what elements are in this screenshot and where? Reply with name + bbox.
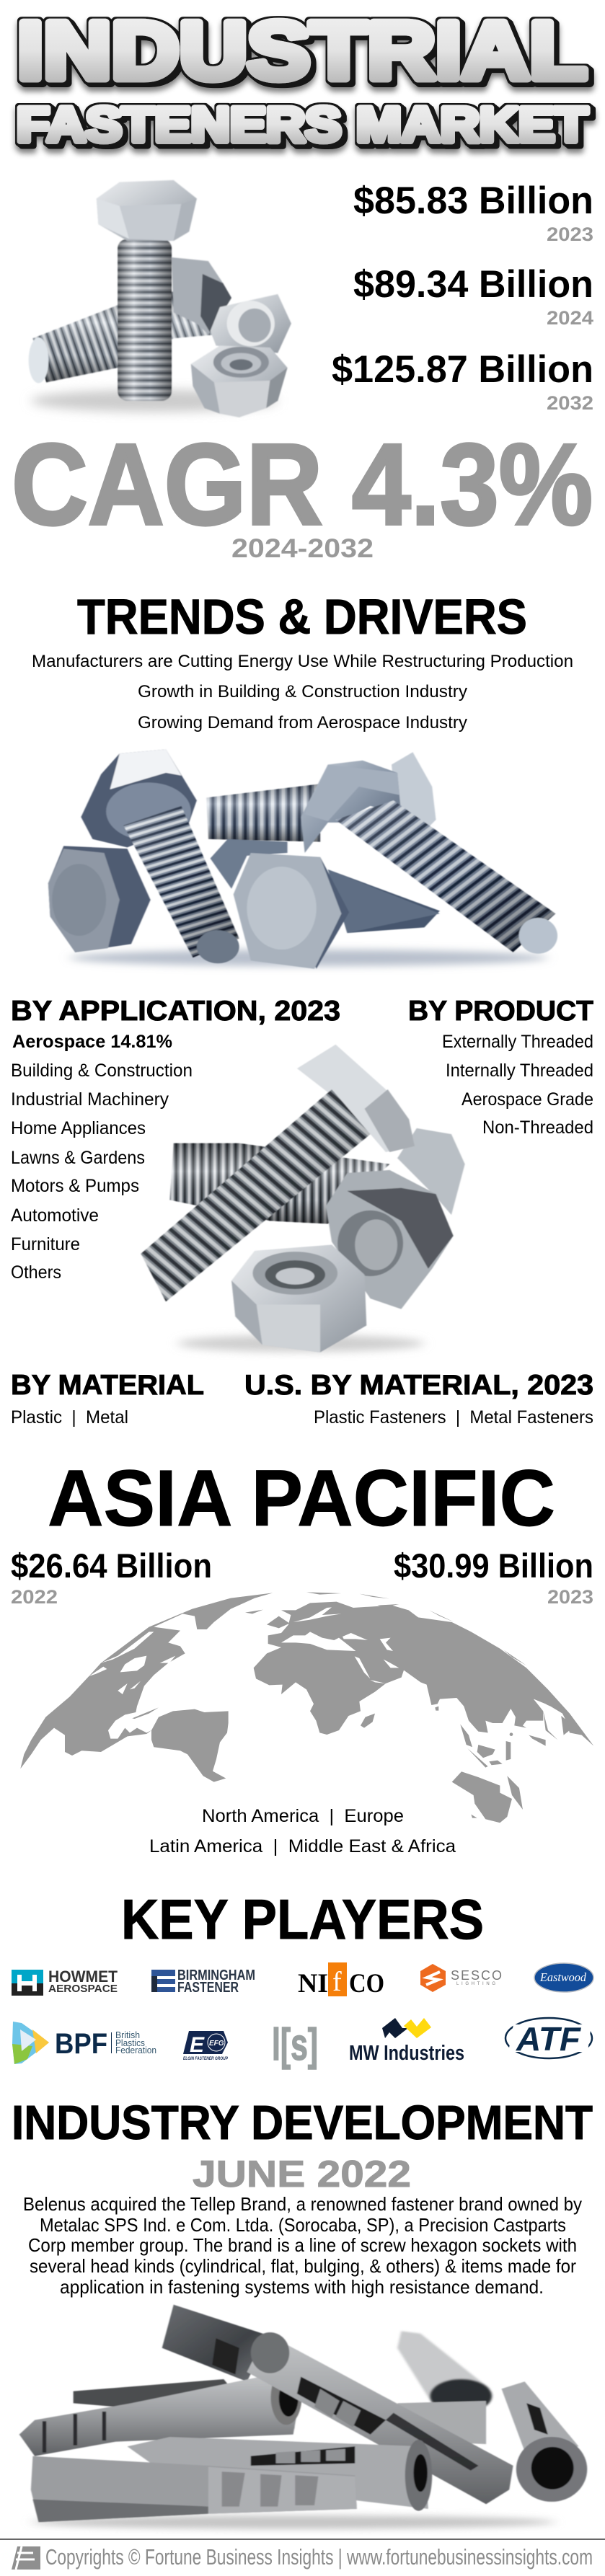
map: world globe: [12, 1592, 593, 1823]
title: [17, 5, 588, 152]
2023 figure: [394, 1546, 593, 1608]
image: pile of bolts: [48, 749, 557, 969]
description: several head kinds (cylindrical, flat, bulging, & others) & items made for: [30, 2255, 576, 2277]
title: INDUSTRIAL: [17, 5, 587, 96]
market size figures: $89.34 Billion: [353, 263, 593, 306]
region list: North America | Europe: [202, 1806, 404, 1826]
panel: by application: Furniture: [11, 1234, 80, 1254]
logo: british plastics federation: BPF: [55, 2028, 107, 2060]
heading: asia pacific: ASIA PACIFIC: [48, 1454, 555, 1543]
image: bolt and nuts: [29, 180, 291, 417]
logo: sesco lighting: [420, 1964, 502, 1992]
panel: by application: Others: [11, 1262, 61, 1283]
driver list: Growing Demand from Aerospace Industry: [138, 713, 468, 732]
panel: by application: Motors & Pumps: [11, 1176, 139, 1196]
image: bolt with nuts: [141, 1045, 465, 1353]
2023 figure: $30.99 Billion: [394, 1546, 593, 1585]
logo: british plastics federation: [12, 2022, 156, 2064]
logo: lisi: l[s]: [272, 2020, 318, 2070]
panel: by product: Externally Threaded: [442, 1032, 593, 1052]
logo: elgin fastener group: ELGIN FASTENER GROUP: [183, 2056, 228, 2061]
panel: by application: Lawns & Gardens: [11, 1148, 145, 1168]
2022 figure: 2022: [11, 1586, 58, 1608]
date: JUNE 2022: [193, 2154, 411, 2195]
panel: by application: Industrial Machinery: [11, 1089, 169, 1110]
panel: by product: Internally Threaded: [446, 1061, 593, 1081]
panel: by product: Non-Threaded: [482, 1117, 593, 1138]
logo: nifco: f: [332, 1967, 342, 1997]
description: Corp member group. The brand is a line of screw hexagon sockets with: [28, 2234, 577, 2256]
logo: eastwood: [534, 1963, 593, 1992]
logo: birmingham fastener: BIRMINGHAM: [177, 1968, 255, 1983]
logo: nifco: CO: [349, 1969, 384, 1999]
region list: Latin America | Middle East & Africa: [149, 1836, 456, 1856]
driver list: [32, 652, 573, 732]
panel: by application: Aerospace 14.81%: [12, 1032, 172, 1052]
logo: british plastics federation: Federation: [115, 2045, 156, 2055]
logo: howmet aerospace: [12, 1968, 118, 1996]
panel: by application: BY APPLICATION, 2023: [11, 996, 340, 1027]
panel: by product: [408, 996, 593, 1138]
logo: british plastics federation: British: [115, 2030, 140, 2040]
logo: eastwood: Eastwood: [539, 1970, 586, 1984]
panel: us by material: [244, 1370, 593, 1428]
panel: by product: BY PRODUCT: [408, 996, 593, 1027]
2023 figure: 2023: [547, 1586, 593, 1608]
logo: elgin fastener group: EFG: [209, 2040, 224, 2048]
title: FASTENERS MARKET: [17, 97, 588, 152]
logo: howmet aerospace: HOWMET: [48, 1968, 118, 1986]
panel: asia pacific: [11, 1454, 593, 1608]
logo: atf: ATF: [516, 2020, 582, 2058]
panel: by application: Automotive: [11, 1205, 99, 1226]
panel: industry development: [12, 2096, 593, 2298]
logo: mw industries: [349, 2018, 464, 2065]
logo: birmingham fastener: [151, 1968, 255, 1996]
description: Metalac SPS Ind. e Com. Ltda. (Sorocaba, SP), a Precision Castparts: [40, 2214, 566, 2236]
market size figures: 2024: [547, 307, 593, 329]
logo: howmet aerospace: AEROSPACE: [48, 1983, 118, 1995]
logo: mw industries: MW Industries: [349, 2042, 464, 2065]
icon: fortune business insights logo: [12, 2546, 40, 2570]
market size figures: 2023: [547, 223, 593, 245]
logo: elgin fastener group: E: [190, 2033, 205, 2057]
footer: [0, 2539, 605, 2570]
panel: us by material: U.S. BY MATERIAL, 2023: [244, 1370, 593, 1401]
description: [23, 2193, 582, 2298]
market size figures: $125.87 Billion: [332, 348, 593, 391]
panel: by application: Home Appliances: [11, 1118, 146, 1138]
logo: nifco: NI: [298, 1969, 328, 1999]
2022 figure: [11, 1546, 212, 1608]
panel: by material: [11, 1370, 204, 1428]
logo: elgin fastener group: [183, 2031, 228, 2061]
heading: trends and drivers: TRENDS & DRIVERS: [77, 589, 527, 645]
logo: birmingham fastener: FASTENER: [177, 1980, 239, 1996]
logo: british plastics federation: Plastics: [115, 2037, 145, 2048]
2022 figure: $26.64 Billion: [11, 1546, 212, 1585]
panel: us by material: Plastic Fasteners | Metal Fasteners: [314, 1407, 593, 1428]
logo: sesco lighting: LIGHTING: [456, 1982, 495, 1986]
logo: atf: [505, 2018, 592, 2058]
panel: by product: Aerospace Grade: [462, 1089, 593, 1110]
CAGR: 2024-2032: [231, 534, 374, 563]
logo: nifco: [298, 1962, 384, 1999]
region list: [149, 1806, 456, 1856]
driver list: Manufacturers are Cutting Energy Use While Restructuring Production: [32, 652, 573, 671]
panel: trends and drivers: [32, 589, 573, 732]
market size figures: [332, 180, 593, 414]
image: plastic wall anchors: [19, 2305, 587, 2529]
driver list: Growth in Building & Construction Industry: [138, 682, 468, 701]
panel: by material: BY MATERIAL: [11, 1370, 204, 1401]
market size figures: 2032: [547, 392, 593, 414]
market size figures: $85.83 Billion: [353, 180, 593, 222]
heading: key players: KEY PLAYERS: [121, 1887, 484, 1951]
panel: by application: Building & Construction: [11, 1061, 193, 1081]
logo: sesco lighting: SESCO: [451, 1968, 502, 1983]
description: application in fastening systems with high resistance demand.: [60, 2276, 544, 2298]
panel: by material: Plastic | Metal: [11, 1407, 128, 1428]
panel: by application: [11, 996, 340, 1283]
